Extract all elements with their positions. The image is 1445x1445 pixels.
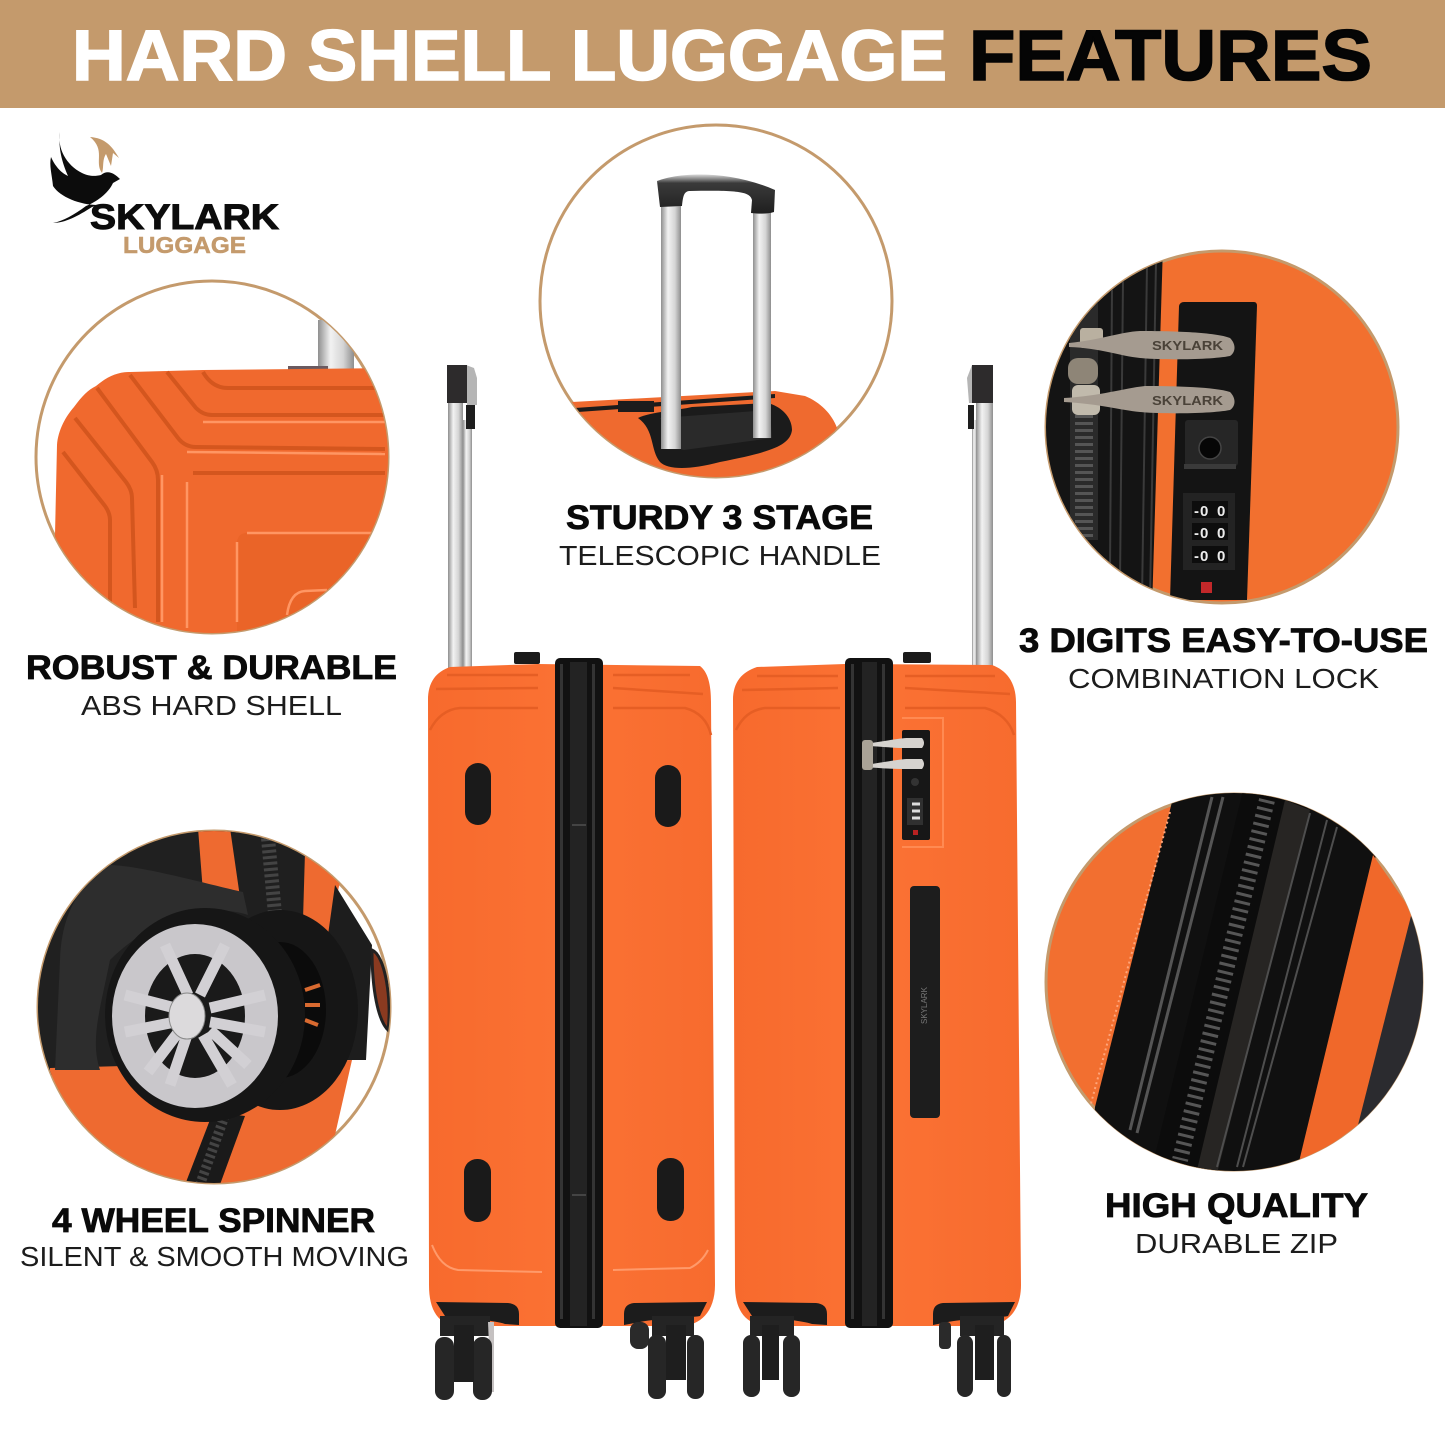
heading: sturdy handle: STURDY 3 STAGE <box>566 499 873 537</box>
heading: durable zip <box>1105 1187 1368 1259</box>
heading: combination lock: 3 DIGITS EASY-TO-USE <box>1019 622 1428 660</box>
lock plate <box>1170 302 1257 600</box>
three digit combination dials <box>1183 493 1235 570</box>
carry handle <box>910 886 940 1118</box>
suitcase: right side view <box>733 365 1021 1397</box>
wheels <box>743 1302 1015 1397</box>
header banner: FEATURES <box>969 17 1372 96</box>
zipper pull two: SKYLARK <box>1152 393 1224 408</box>
panel: telescopic handle photo <box>540 125 892 490</box>
panel: combination lock photo <box>1040 245 1398 610</box>
panel: spinner wheel photo <box>30 828 390 1195</box>
front wheel tyre <box>105 908 305 1122</box>
keyhole <box>1184 420 1238 469</box>
panel: robust shell corner photo <box>36 281 395 640</box>
telescopic handle <box>447 365 477 670</box>
heading: combination lock: COMBINATION LOCK <box>1068 663 1379 694</box>
three digit combination dials: -0 <box>1194 503 1209 520</box>
logo: Skylark Luggage: SKYLARK <box>90 198 279 237</box>
heading: wheel spinner: 4 WHEEL SPINNER <box>52 1202 375 1240</box>
side feet <box>464 763 684 1222</box>
wheel fork <box>55 865 248 1070</box>
heading: sturdy handle <box>559 499 881 571</box>
panel: durable zip photo <box>1046 790 1440 1175</box>
zipper pull two <box>1064 386 1234 413</box>
front wheel rim and spokes <box>112 924 278 1108</box>
zipper pull one <box>1069 331 1234 359</box>
telescopic handle <box>967 365 993 668</box>
heading: robust and durable: ABS HARD SHELL <box>81 690 342 721</box>
logo: Skylark Luggage <box>50 132 279 258</box>
heading: robust and durable <box>26 649 397 721</box>
three digit combination dials: 0 <box>1217 548 1225 565</box>
header banner <box>0 0 1445 108</box>
wheels <box>435 1302 707 1400</box>
heading: durable zip: HIGH QUALITY <box>1105 1187 1368 1225</box>
centre zip band <box>845 658 893 1328</box>
logo: Skylark Luggage: LUGGAGE <box>123 232 246 258</box>
title: HARD SHELL LUGGAGE <box>72 17 947 96</box>
heading: sturdy handle: TELESCOPIC HANDLE <box>559 540 881 571</box>
heading: combination lock <box>1019 622 1428 694</box>
three digit combination dials: -0 <box>1194 525 1209 542</box>
carry handle: SKYLARK <box>920 986 929 1024</box>
lock plate <box>862 730 930 840</box>
heading: robust and durable: ROBUST & DURABLE <box>26 649 397 687</box>
three digit combination dials: 0 <box>1217 525 1225 542</box>
rear wheel <box>249 910 348 1110</box>
three digit combination dials: 0 <box>1217 503 1225 520</box>
heading: wheel spinner <box>20 1202 409 1272</box>
heading: durable zip: DURABLE ZIP <box>1135 1228 1338 1259</box>
centre zip band <box>555 658 603 1328</box>
heading: wheel spinner: SILENT & SMOOTH MOVING <box>20 1241 409 1272</box>
zipper pull one: SKYLARK <box>1152 338 1224 353</box>
three digit combination dials: -0 <box>1194 548 1209 565</box>
suitcase: left side view <box>428 365 715 1400</box>
zipper sliders <box>1068 328 1103 415</box>
